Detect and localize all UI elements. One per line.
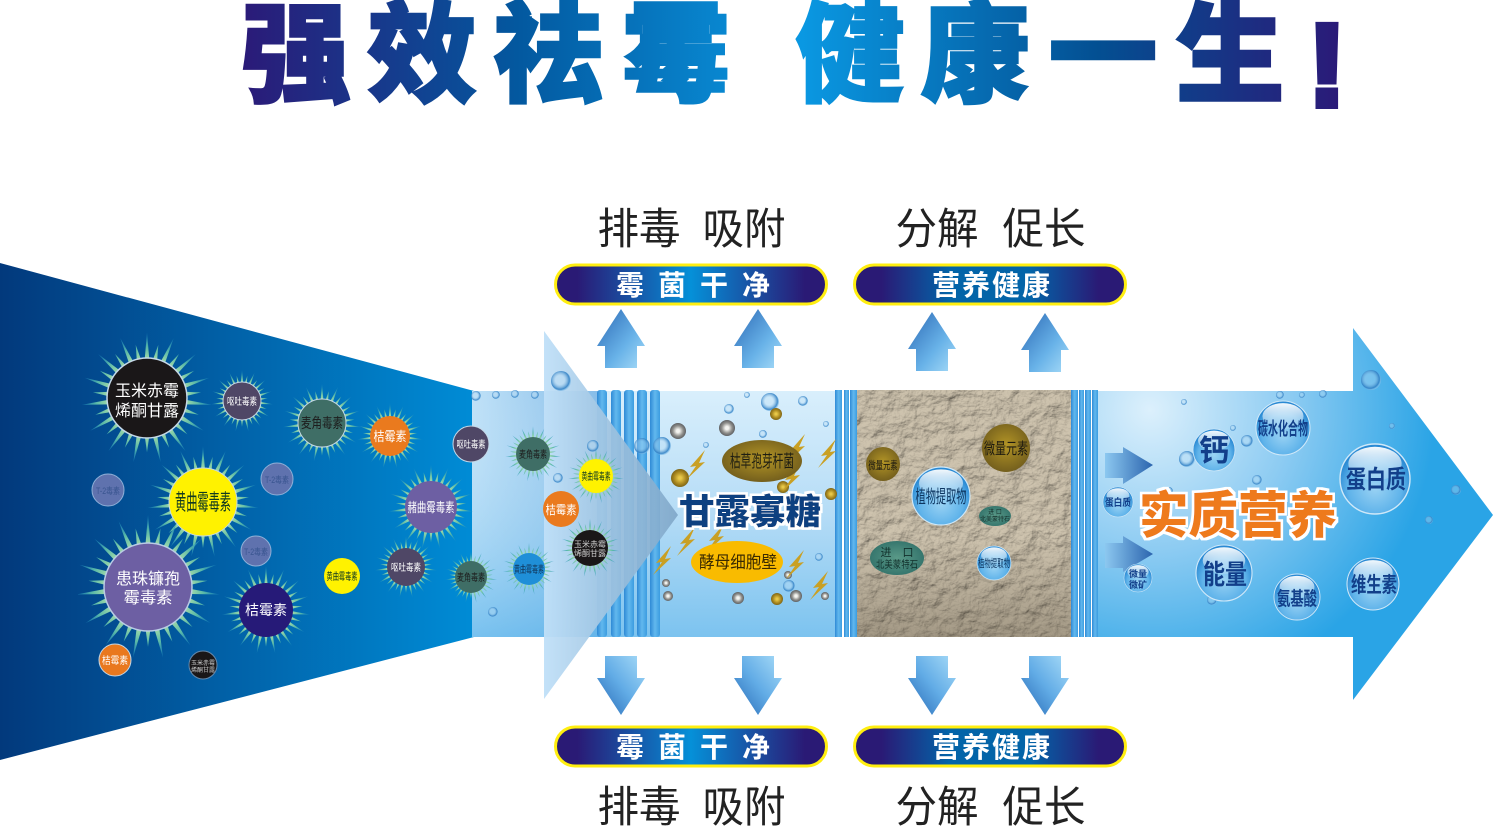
toxin: zearalenone on triangle	[561, 518, 619, 577]
toxin: aflatoxin blue: 黄曲霉毒素	[514, 563, 544, 576]
pill: health top: 营养健康	[932, 270, 1050, 301]
toxin: aflatoxin on triangle	[568, 448, 624, 503]
bubble: calcium: 钙	[1199, 435, 1229, 468]
toxin: ochratoxin	[388, 464, 474, 549]
bubble: carbohydrate	[1256, 401, 1310, 455]
bubble: energy	[1196, 545, 1252, 601]
toxin: ergot inner	[505, 426, 561, 481]
toxin: aflatoxin	[147, 446, 259, 557]
arrow: small right 1	[1105, 447, 1153, 484]
toxin: citrinin navy	[222, 566, 310, 654]
label: yeast wall	[691, 541, 783, 583]
bubble: trace minerals: 微矿	[1129, 579, 1147, 590]
panel: mannan oligosaccharide	[597, 390, 857, 637]
toxin: fumonisin: 患珠镰孢	[116, 570, 180, 588]
toxin: T-2 two	[261, 463, 293, 495]
toxin: citrinin plain: 桔霉素	[546, 503, 576, 517]
toxin: ergot	[283, 384, 361, 462]
toxin: T-2 one	[92, 474, 124, 506]
panel: soil	[857, 390, 1071, 637]
label: bacillus	[722, 440, 802, 482]
bubble: carbohydrate: 碳水化合物	[1258, 418, 1308, 439]
toxin: ergot inner: 麦角毒素	[519, 448, 547, 461]
toxin: zearalenone on triangle: 烯酮甘露	[574, 548, 606, 558]
label: bacillus: 枯草孢芽杆菌	[730, 452, 794, 471]
pill: clean top	[556, 265, 826, 304]
toxin: vomitoxin lower	[375, 536, 437, 598]
toxin: T-2 three	[241, 536, 271, 566]
bubble: vitamin: 维生素	[1351, 574, 1397, 597]
bubble: vitamin	[1347, 558, 1399, 610]
arrows: down	[597, 656, 1069, 715]
heading: detox top	[598, 206, 786, 254]
toxin: citrinin small	[99, 644, 131, 676]
pill: clean bottom	[556, 727, 826, 766]
bubble: amino acid: 氨基酸	[1277, 588, 1317, 610]
bubble: amino acid	[1274, 574, 1320, 620]
label: trace elements small	[866, 447, 900, 481]
heading: decompose bottom	[896, 784, 1086, 826]
toxin: citrinin orange: 桔霉素	[374, 429, 406, 444]
title	[242, 0, 1347, 132]
panel: triangle overlay	[544, 331, 678, 699]
heading: detox top: 吸附	[702, 206, 786, 254]
bubble: protein large: 蛋白质	[1346, 466, 1406, 494]
icon: lightning bolts	[653, 434, 836, 600]
pill: clean top: 霉 菌 干 净	[616, 270, 770, 301]
droplets: neck	[471, 371, 650, 617]
bubble: plant extract small	[977, 546, 1011, 580]
toxin: zearalenone large: 烯酮甘露	[115, 402, 179, 420]
toxin: ergot lower: 麦角毒素	[457, 571, 485, 584]
toxin: zearalenone large: 玉米赤霉	[115, 382, 179, 400]
toxin: aflatoxin plain	[324, 558, 360, 594]
pill: health bottom	[854, 727, 1126, 766]
heading: decompose top	[896, 206, 1086, 254]
panel: toxin funnel	[0, 263, 474, 760]
bubble: plant extract	[912, 467, 970, 525]
title: !	[1307, 0, 1347, 132]
toxin: citrinin plain	[543, 491, 579, 527]
label: montmorillonite: 进 口	[880, 546, 914, 559]
bubble: plant extract: 植物提取物	[916, 487, 966, 507]
toxin: ergot: 麦角毒素	[301, 415, 343, 431]
label: montmorillonite small: 北美蒙特石	[980, 515, 1010, 523]
toxin: zearalenone large	[82, 332, 212, 463]
bubble: trace minerals	[1124, 564, 1152, 592]
toxin: ochratoxin: 赭曲霉毒素	[408, 500, 454, 515]
heading: detox top: 排毒	[598, 206, 680, 254]
bubble: calcium	[1193, 429, 1235, 471]
bubble: plant extract small: 植物提取物	[978, 556, 1010, 570]
toxin: aflatoxin blue	[503, 543, 555, 595]
bubble: protein small: 蛋白质	[1105, 496, 1131, 509]
toxin: vomitoxin lower: 呕吐毒素	[391, 561, 421, 574]
heading: real nutrition: 实质营养	[1139, 488, 1337, 544]
label: yeast wall: 酵母细胞壁	[699, 553, 777, 572]
bubble: protein small	[1103, 487, 1133, 517]
toxin: aflatoxin on triangle: 黄曲霉毒素	[582, 470, 610, 483]
stripes: right filter	[1071, 390, 1098, 637]
pill: health bottom: 营养健康	[932, 732, 1050, 763]
arrows: up	[597, 309, 1069, 372]
toxin: zearalenone small	[189, 651, 217, 679]
pill: clean bottom: 霉 菌 干 净	[616, 732, 770, 763]
toxin: citrinin small: 桔霉素	[102, 654, 128, 667]
label: montmorillonite small: 进 口	[988, 508, 1002, 516]
label: montmorillonite	[870, 541, 924, 575]
toxin: vomitoxin plain	[453, 426, 489, 462]
toxin: vomitoxin: 呕吐毒素	[227, 395, 257, 408]
toxin: vomitoxin plain: 呕吐毒素	[456, 438, 486, 451]
label: trace elements	[982, 424, 1030, 472]
bubble: protein large	[1340, 444, 1410, 514]
toxin: ergot lower	[445, 551, 497, 603]
label: montmorillonite: 北美蒙特石	[876, 558, 918, 571]
label: trace elements: 微量元素	[984, 440, 1028, 458]
toxin: fumonisin	[76, 515, 220, 658]
panel: nutrient arrow content	[1103, 370, 1461, 620]
toxin: T-2 three: T-2毒素	[244, 546, 268, 557]
panel: arrow body	[472, 328, 1493, 700]
heading: detox bottom	[598, 784, 786, 826]
toxin: T-2 one: T-2毒素	[96, 485, 120, 496]
heading: mannan: 甘露寡糖	[679, 493, 821, 532]
bubble: energy: 能量	[1203, 560, 1247, 590]
label: montmorillonite small	[979, 506, 1011, 526]
toxin: vomitoxin	[211, 370, 273, 432]
toxin: aflatoxin plain: 黄曲霉毒素	[326, 570, 358, 583]
toxin: zearalenone on triangle: 玉米赤霉	[574, 539, 606, 549]
bubble: trace minerals: 微量	[1129, 568, 1147, 579]
heading: decompose top: 分解	[896, 206, 978, 254]
toxin: zearalenone small: 玉米赤霉	[191, 659, 215, 667]
toxin: fumonisin: 霉毒素	[124, 589, 172, 607]
heading: decompose top: 促长	[1002, 206, 1086, 254]
toxin: citrinin navy: 桔霉素	[245, 602, 287, 618]
toxin: citrinin orange	[357, 403, 423, 468]
label: trace elements small: 微量元素	[868, 458, 898, 472]
toxin: zearalenone small: 烯酮甘露	[191, 666, 215, 674]
arrow: small right 2	[1105, 536, 1153, 572]
toxin: T-2 two: T-2毒素	[265, 474, 289, 485]
pill: health top	[854, 265, 1126, 304]
toxin: aflatoxin: 黄曲霉毒素	[175, 490, 231, 515]
